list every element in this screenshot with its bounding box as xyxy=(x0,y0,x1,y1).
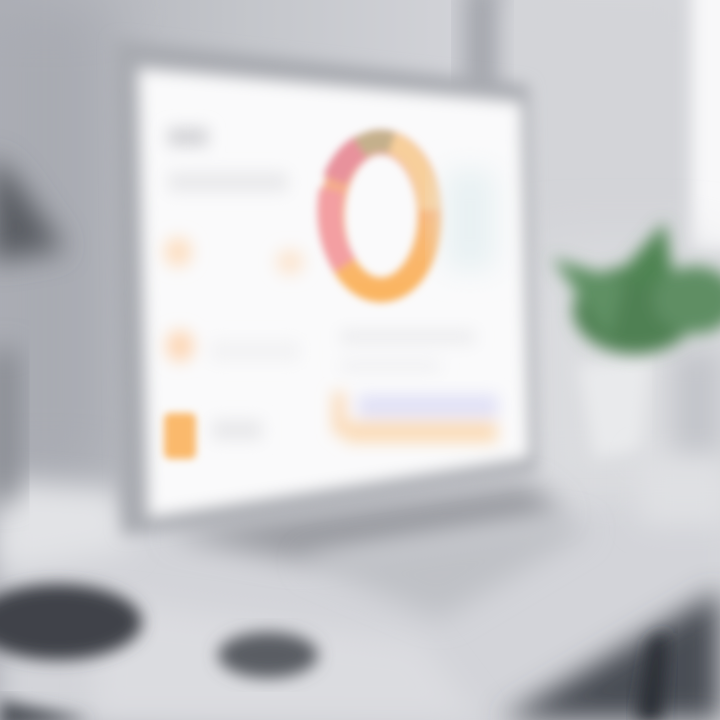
stacked area chart xyxy=(334,392,498,442)
dashboard left column xyxy=(164,128,304,440)
desk xyxy=(0,480,720,720)
monitor frame xyxy=(115,40,536,535)
dark notebook on desk xyxy=(0,584,142,660)
mouse xyxy=(218,632,318,678)
orange square icon xyxy=(164,413,196,459)
plant leaves xyxy=(552,222,720,354)
text lines under chart xyxy=(340,330,475,372)
donut legend tint xyxy=(445,170,495,270)
monitor stand and keyboard xyxy=(165,485,590,620)
plant pot xyxy=(578,350,720,525)
donut chart xyxy=(330,141,430,290)
desk lamp xyxy=(0,155,65,500)
screen xyxy=(138,68,530,518)
